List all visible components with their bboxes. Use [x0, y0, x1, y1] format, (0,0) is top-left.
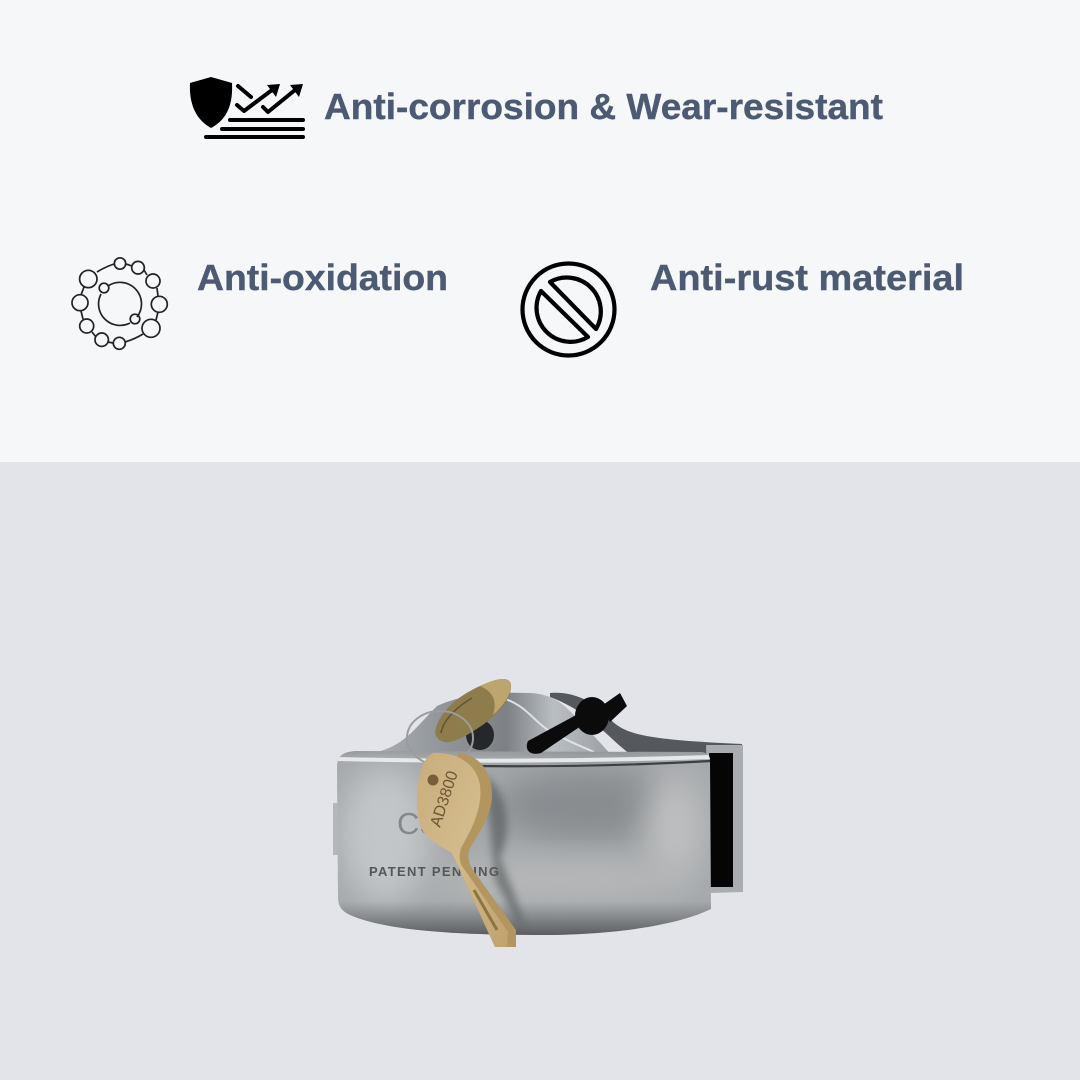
engraved patent text: PATENT PENDING [369, 864, 499, 879]
icon: shield with rising arrows [190, 77, 303, 137]
hasp housing [706, 745, 743, 893]
hasp arm [550, 693, 742, 754]
dome highlight [505, 699, 594, 752]
back key bow [435, 679, 511, 742]
icon: prohibition sign [522, 264, 614, 356]
top panel background [0, 0, 1080, 462]
heading: anti-rust material: Anti-rust material [650, 257, 964, 298]
lock body [330, 745, 715, 940]
engraved text: CS [397, 806, 440, 841]
key ring [407, 711, 473, 765]
heading: anti-oxidation: Anti-oxidation [197, 257, 448, 298]
product photo: padlock with keys [330, 679, 743, 947]
black rubber cap and strap [527, 693, 627, 754]
icon: oxidation ring of molecules [72, 258, 167, 349]
side tab [333, 803, 338, 855]
back key [455, 753, 516, 947]
bottom panel background [0, 462, 1080, 1080]
front key with engraved code [417, 753, 508, 947]
front key with engraved code: AD3800 [428, 769, 462, 829]
heading: anti-corrosion and wear-resistant: Anti-corrosion & Wear-resistant [324, 86, 883, 127]
lock dome [377, 693, 612, 756]
key cylinder [466, 720, 494, 750]
key shadow [485, 775, 522, 930]
